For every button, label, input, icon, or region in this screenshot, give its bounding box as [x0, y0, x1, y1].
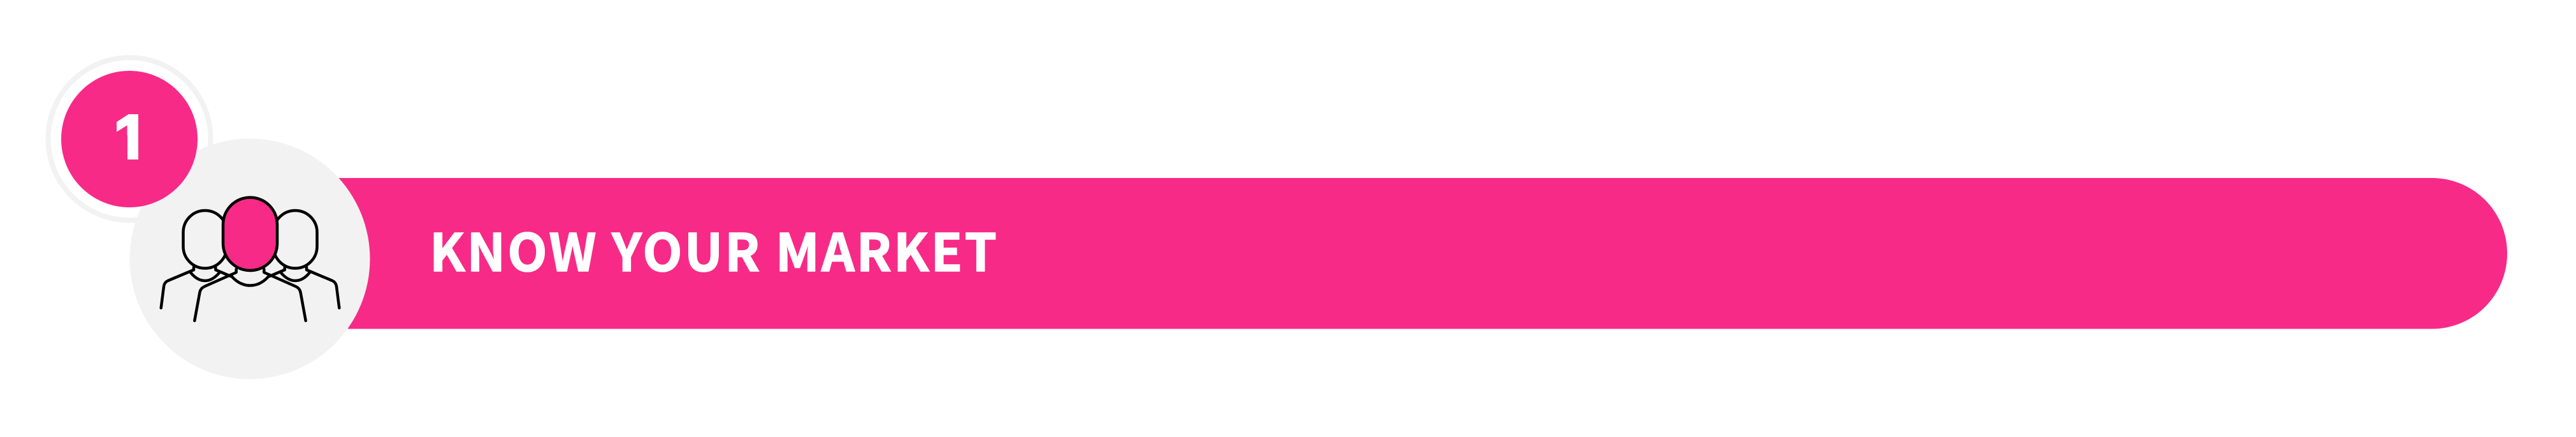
banner bar [255, 178, 2507, 329]
icon: left person [161, 211, 231, 308]
icon: group of three people [161, 198, 339, 321]
icon: right person [270, 211, 339, 308]
number badge [61, 71, 198, 207]
number badge outer ring [48, 57, 210, 220]
icon background circle [130, 138, 370, 379]
number badge: 1 [113, 102, 149, 174]
title: know your market: KNOW YOUR MARKET [430, 212, 997, 286]
icon: center person [194, 198, 306, 321]
